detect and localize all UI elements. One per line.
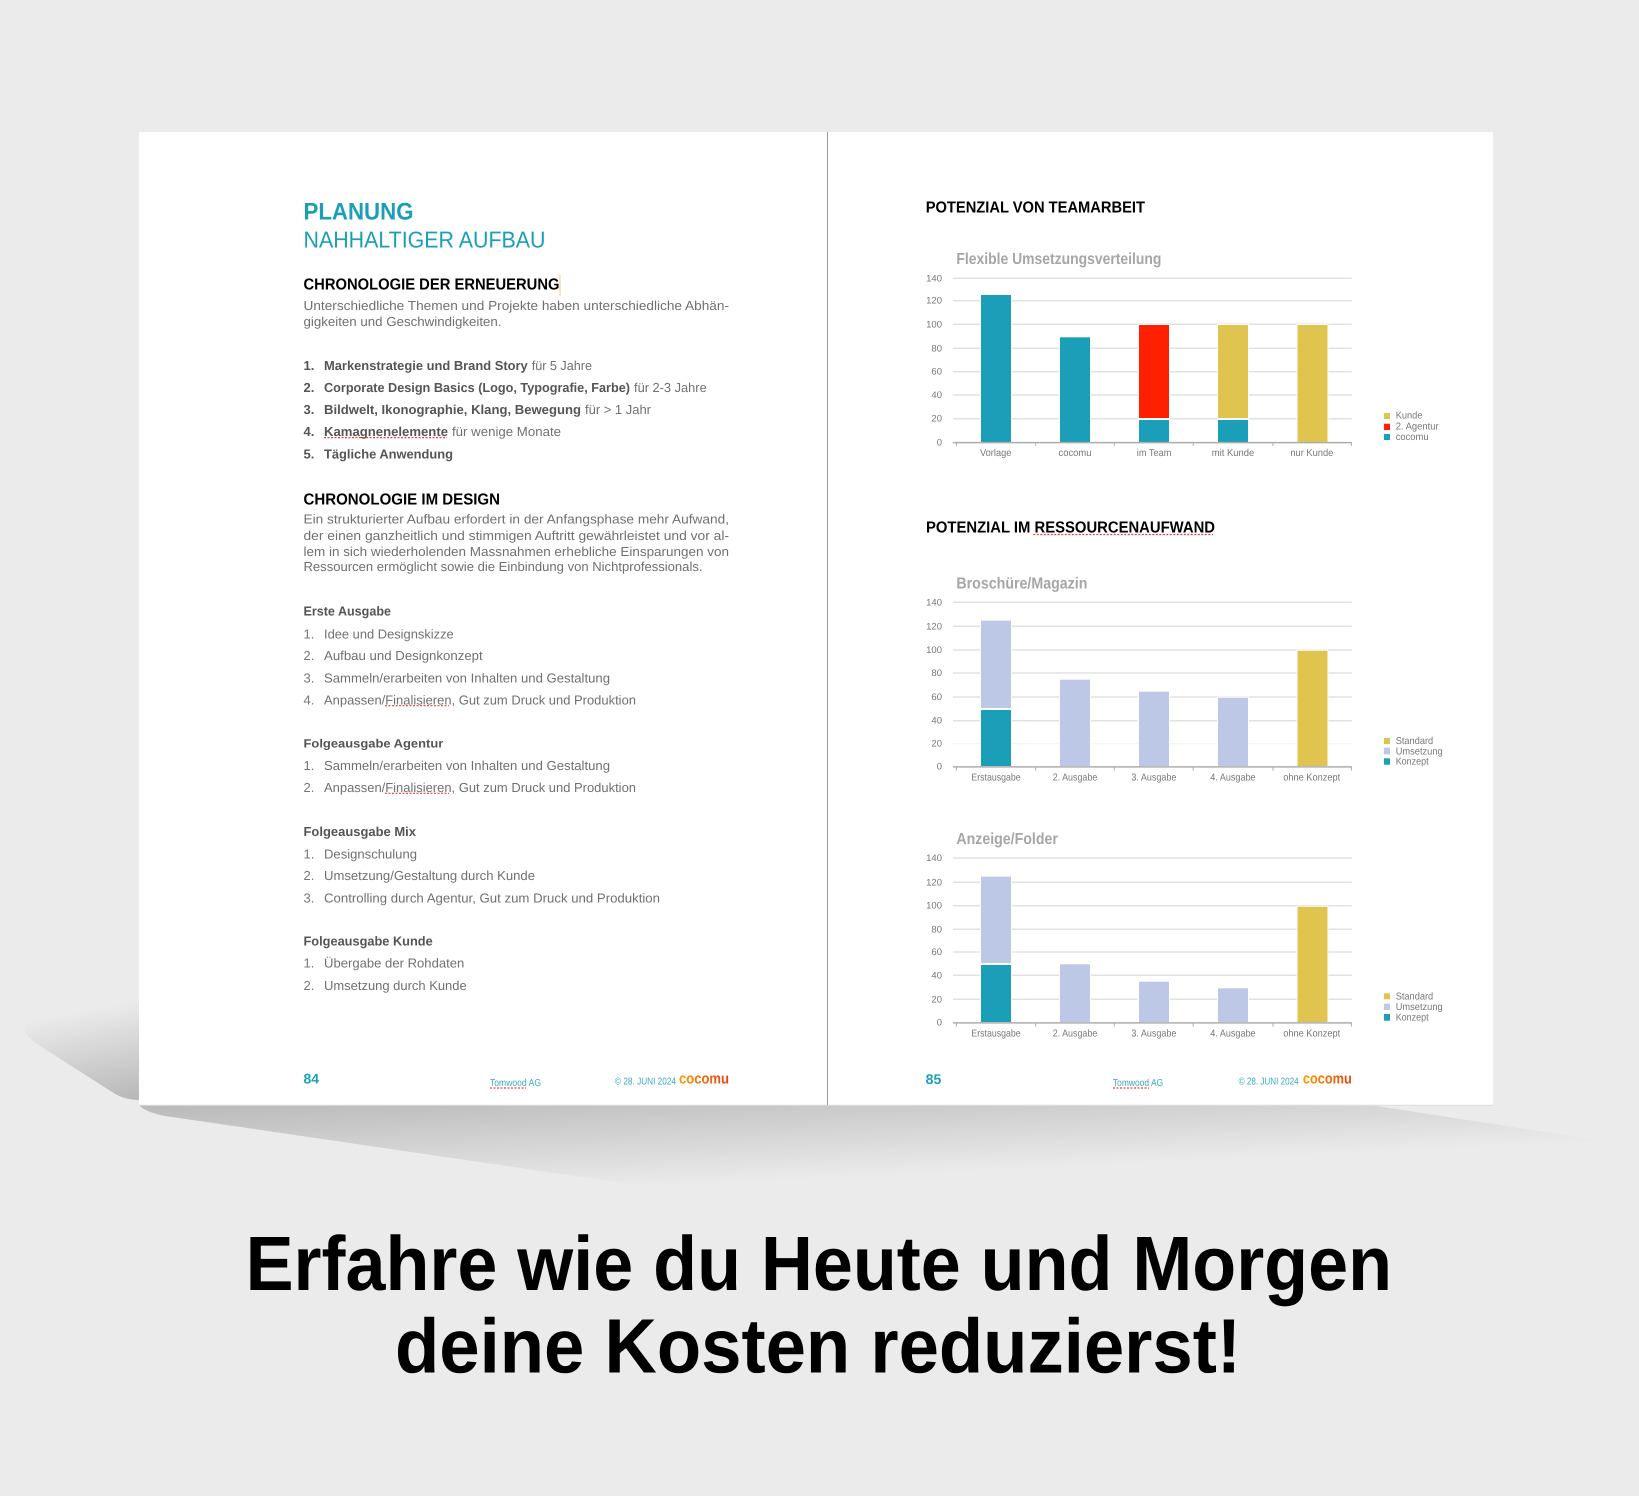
y axis labels: 0	[937, 762, 942, 773]
footer: page 85: cocomu	[1303, 1070, 1352, 1087]
y axis labels: 20	[931, 739, 942, 750]
list: Folgeausgabe Kunde: Umsetzung durch Kunde	[324, 978, 467, 993]
heading: Planung: NAHHALTIGER AUFBAU	[304, 226, 546, 252]
numbered list: Lebensdauer: Bildwelt, Ikonographie, Klang, Bewegung	[324, 402, 581, 417]
list: Erste Ausgabe: Aufbau und Designkonzept	[324, 648, 483, 663]
numbered list: Lebensdauer: für > 1 Jahr	[585, 402, 652, 417]
footer: page 84: © 28. JUNI 2024	[615, 1076, 676, 1087]
y axis labels: 40	[931, 390, 942, 401]
y axis labels: 80	[931, 343, 942, 354]
headline	[246, 1221, 1392, 1390]
y axis labels: 20	[931, 414, 942, 425]
x axis	[953, 766, 1352, 784]
section: Chronologie im Design: der einen ganzheitlich und stimmigen Auftritt gewährleistet und vor al-	[304, 528, 729, 543]
list: Folgeausgabe Mix: Umsetzung/Gestaltung durch Kunde	[324, 868, 535, 883]
legend: cocomu	[1396, 432, 1429, 443]
headline: deine Kosten reduzierst!	[395, 1304, 1241, 1390]
legend: Kunde	[1396, 411, 1423, 422]
y axis labels: 80	[931, 924, 942, 935]
y axis labels: 60	[931, 367, 942, 378]
section: Chronologie im Design: Ein strukturierter Aufbau erfordert in der Anfangsphase mehr Aufwand,	[304, 511, 729, 526]
y axis labels: 100	[926, 901, 942, 912]
x axis: im Team	[1137, 448, 1171, 459]
y axis labels: 120	[926, 621, 942, 632]
chart: Flexible Umsetzungsverteilung: Flexible Umsetzungsverteilung	[956, 251, 1161, 268]
y axis labels: 60	[931, 947, 942, 958]
list: Folgeausgabe Kunde	[304, 934, 467, 993]
x axis: Erstausgabe	[971, 773, 1021, 784]
footer: page 85: © 28. JUNI 2024	[1239, 1077, 1299, 1088]
section: Chronologie der Erneuerung: Unterschiedliche Themen und Projekte haben unterschiedliche Abhän-	[304, 298, 729, 313]
section: Chronologie im Design	[304, 491, 729, 574]
y axis labels: 100	[926, 319, 942, 330]
chart: Anzeige/Folder: Anzeige/Folder	[956, 831, 1058, 848]
list: Erste Ausgabe: 3.	[304, 670, 314, 685]
heading: Planung: PLANUNG	[304, 198, 414, 226]
y axis labels: 40	[931, 970, 942, 981]
headline: Erfahre wie du Heute und Morgen	[246, 1221, 1392, 1307]
y axis labels: 120	[926, 296, 942, 307]
list: Erste Ausgabe: Idee und Designskizze	[324, 626, 454, 641]
legend: Konzept	[1396, 756, 1429, 767]
section: Chronologie der Erneuerung	[304, 275, 729, 329]
list: Folgeausgabe Agentur: Folgeausgabe Agentur	[304, 736, 444, 750]
list: Folgeausgabe Kunde: Übergabe der Rohdaten	[324, 955, 464, 970]
footer: page 84: cocomu	[679, 1070, 729, 1087]
list: Folgeausgabe Agentur: 2.	[304, 780, 314, 795]
panel: left page text	[304, 198, 729, 1089]
section: Chronologie der Erneuerung: CHRONOLOGIE DER ERNEUERUNG	[304, 276, 560, 294]
x axis: mit Kunde	[1212, 448, 1255, 459]
list: Folgeausgabe Mix: Controlling durch Agentur, Gut zum Druck und Produktion	[324, 891, 660, 906]
section: Chronologie im Design: lem in sich wiederholenden Massnahmen erhebliche Einsparungen von	[304, 544, 729, 559]
list: Folgeausgabe Mix: Designschulung	[324, 846, 417, 861]
x axis: 2. Ausgabe	[1053, 1029, 1098, 1040]
x axis: 4. Ausgabe	[1210, 1029, 1256, 1040]
x axis: 3. Ausgabe	[1131, 773, 1177, 784]
numbered list: Lebensdauer: für 2-3 Jahre	[634, 380, 707, 395]
section: Chronologie der Erneuerung: gigkeiten und Geschwindigkeiten.	[304, 314, 502, 329]
chart: Broschüre/Magazin	[926, 575, 1443, 784]
y axis labels: 60	[931, 692, 942, 703]
page shadow: bottom	[139, 1105, 1603, 1187]
numbered list: Lebensdauer: 3.	[304, 402, 314, 417]
list: Erste Ausgabe	[304, 604, 636, 707]
heading: Potenzial von Teamarbeit: POTENZIAL VON TEAMARBEIT	[926, 200, 1145, 217]
bars	[980, 294, 1328, 442]
panel: right page charts	[926, 200, 1443, 1089]
list: Erste Ausgabe: Anpassen/Finalisieren, Gut zum Druck und Produktion	[324, 692, 636, 707]
y axis labels: 20	[931, 994, 942, 1005]
list: Folgeausgabe Agentur	[304, 736, 636, 795]
footer: page 85	[926, 1070, 1352, 1089]
list: Erste Ausgabe: Erste Ausgabe	[304, 604, 391, 619]
list: Folgeausgabe Agentur: 1.	[304, 758, 314, 773]
list: Folgeausgabe Mix: 1.	[304, 846, 314, 861]
y axis labels	[926, 853, 942, 1029]
y axis labels: 0	[937, 1018, 942, 1029]
footer: page 84: 84	[304, 1070, 319, 1086]
y axis labels: 40	[931, 716, 942, 727]
legend: Umsetzung	[1396, 746, 1443, 757]
list: Folgeausgabe Agentur: Sammeln/erarbeiten von Inhalten und Gestaltung	[324, 758, 610, 773]
x axis: nur Kunde	[1290, 448, 1334, 459]
x axis: 4. Ausgabe	[1210, 773, 1256, 784]
section: Chronologie im Design: Ressourcen ermöglicht sowie die Einbindung von Nichtprofessionals.	[304, 559, 702, 574]
numbered list: Lebensdauer: Kamagnenelemente	[324, 424, 448, 439]
book spread	[139, 132, 1493, 1105]
list: Folgeausgabe Kunde: 1.	[304, 955, 314, 970]
numbered list: Lebensdauer	[304, 358, 707, 462]
list: Erste Ausgabe: 4.	[304, 692, 314, 707]
y axis labels: 140	[926, 273, 942, 284]
y axis labels: 100	[926, 645, 942, 656]
legend	[1384, 991, 1443, 1024]
list: Erste Ausgabe: 2.	[304, 648, 314, 663]
numbered list: Lebensdauer: Corporate Design Basics (Logo, Typografie, Farbe)	[324, 380, 630, 395]
y axis labels	[926, 273, 942, 448]
chart: Anzeige/Folder	[926, 831, 1443, 1040]
x axis: Vorlage	[980, 448, 1012, 459]
x axis: 3. Ausgabe	[1131, 1029, 1177, 1040]
y axis labels: 140	[926, 597, 942, 608]
section: Chronologie im Design: CHRONOLOGIE IM DESIGN	[304, 491, 500, 508]
legend: 2. Agentur	[1396, 422, 1439, 433]
y axis labels	[926, 597, 942, 773]
y axis labels: 0	[937, 437, 942, 448]
numbered list: Lebensdauer: 1.	[304, 358, 314, 373]
list: Folgeausgabe Kunde: Folgeausgabe Kunde	[304, 934, 433, 949]
footer: page 85: 85	[926, 1071, 942, 1087]
bars	[980, 876, 1328, 1022]
chart: Flexible Umsetzungsverteilung	[926, 251, 1439, 459]
y axis labels: 140	[926, 853, 942, 864]
list: Folgeausgabe Mix: Folgeausgabe Mix	[304, 824, 417, 839]
list: Folgeausgabe Mix: 2.	[304, 868, 314, 883]
x axis: ohne Konzept	[1283, 773, 1340, 784]
footer: page 84	[304, 1070, 729, 1089]
numbered list: Lebensdauer: 5.	[304, 447, 314, 462]
numbered list: Lebensdauer: für 5 Jahre	[532, 358, 592, 373]
x axis: 2. Ausgabe	[1053, 773, 1098, 784]
legend: Konzept	[1396, 1013, 1429, 1024]
list: Erste Ausgabe: 1.	[304, 626, 314, 641]
legend: Standard	[1396, 991, 1433, 1002]
heading: Planung	[304, 198, 546, 252]
legend: Standard	[1396, 736, 1433, 747]
legend: Umsetzung	[1396, 1002, 1443, 1013]
numbered list: Lebensdauer: 2.	[304, 380, 314, 395]
x axis: cocomu	[1058, 448, 1092, 459]
y axis labels: 80	[931, 668, 942, 679]
x axis: Erstausgabe	[971, 1029, 1021, 1040]
list: Folgeausgabe Mix: 3.	[304, 891, 314, 906]
list: Folgeausgabe Kunde: 2.	[304, 978, 314, 993]
legend	[1384, 411, 1439, 443]
footer: page 84: Tomwood AG	[490, 1078, 541, 1089]
chart: Broschüre/Magazin: Broschüre/Magazin	[956, 575, 1087, 592]
x axis	[953, 1022, 1352, 1040]
numbered list: Lebensdauer: Tägliche Anwendung	[324, 447, 453, 462]
numbered list: Lebensdauer: Markenstrategie und Brand Story	[324, 358, 528, 373]
footer: page 85: Tomwood AG	[1113, 1078, 1163, 1089]
numbered list: Lebensdauer: 4.	[304, 424, 314, 439]
legend	[1384, 736, 1443, 767]
list: Folgeausgabe Agentur: Anpassen/Finalisieren, Gut zum Druck und Produktion	[324, 780, 636, 795]
y axis labels: 120	[926, 877, 942, 888]
list: Folgeausgabe Mix	[304, 824, 660, 906]
page shadow: left corner	[24, 1000, 139, 1100]
numbered list: Lebensdauer: für wenige Monate	[452, 424, 561, 439]
bars	[980, 620, 1328, 766]
x axis	[953, 442, 1352, 459]
list: Erste Ausgabe: Sammeln/erarbeiten von Inhalten und Gestaltung	[324, 670, 610, 685]
x axis: ohne Konzept	[1283, 1029, 1340, 1040]
heading: Potenzial im Ressourcenaufwand: POTENZIAL IM RESSOURCENAUFWAND	[926, 520, 1215, 537]
